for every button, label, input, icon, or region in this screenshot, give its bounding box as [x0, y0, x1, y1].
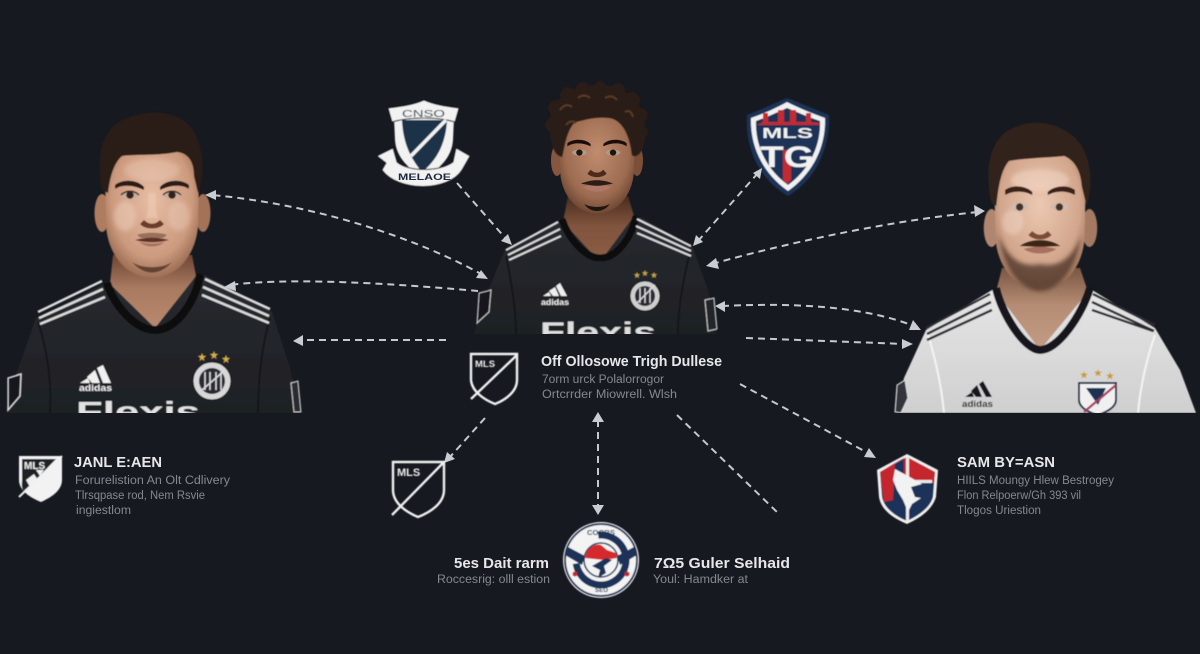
- jersey: left player: adidas: [79, 383, 112, 394]
- heading: bottom left: 5es Dait rarm: [454, 555, 549, 572]
- logo: bottom round badge: [563, 522, 639, 598]
- text: MLS left: MLS: [24, 461, 45, 472]
- text: left line 3: ingiestlom: [76, 505, 131, 517]
- text: TG: TG: [760, 141, 814, 174]
- text: left line 2: Tlrsqpase rod, Nem Rsvie: [75, 490, 205, 502]
- text: bottom left line: Roccesrig: olll estion: [437, 574, 550, 586]
- logo: MLS shield left: [19, 456, 62, 502]
- text: right line 3: Tlogos Uriestion: [957, 505, 1041, 517]
- jersey: left player: [6, 255, 301, 427]
- text: badge bottom: SEO: [595, 588, 608, 594]
- jersey: center player: Flexis: [540, 317, 656, 347]
- logo: MLS TG crest: [747, 98, 829, 196]
- head: right player: [984, 123, 1097, 291]
- text: right line 1: HIILS Moungy Hlew Bestrogey: [957, 475, 1114, 487]
- jersey: center player: adidas: [541, 298, 570, 307]
- text: left line 1: Forurelistion An Olt Cdlivery: [75, 475, 230, 487]
- logo: CNSO crest: [377, 100, 470, 186]
- heading: left player: JANL E:AEN: [74, 454, 162, 471]
- player: right, white jersey: [895, 123, 1196, 415]
- text block: left player info: [74, 454, 230, 517]
- infographic canvas: [6, 80, 1196, 599]
- text block: bottom left info: [437, 555, 550, 586]
- text: MLS: MLS: [762, 125, 813, 142]
- text: center line 1: 7orm urck Polalorrogor: [542, 374, 664, 386]
- text: bottom right line: Youl: Hamdker at: [653, 574, 749, 586]
- text: MLS lower left: MLS: [397, 467, 420, 479]
- text: right line 2: Flon Relpoerw/Gh 393 vil: [957, 490, 1081, 502]
- text: MLS center: MLS: [475, 359, 495, 370]
- text: CNSO crest top: CNSO: [402, 109, 445, 120]
- jersey: right player: adidas: [962, 399, 993, 410]
- text block: right player info: [957, 454, 1114, 517]
- head: center player: [551, 108, 643, 213]
- head: left player: [94, 113, 210, 278]
- text: center line 2: Ortcrrder Miowrell. Wlsh: [542, 389, 677, 401]
- text block: bottom right info: [653, 555, 790, 586]
- text: CNSO crest bottom: MELAOE: [398, 172, 451, 182]
- heading: right player: SAM BY=ASN: [957, 454, 1055, 471]
- jersey: right player: [895, 268, 1196, 415]
- text block: center info: [541, 353, 722, 401]
- logo: MLS shield lower left: [392, 462, 444, 517]
- text: badge top: COOBS: [587, 530, 615, 537]
- heading: center info: Off Ollosowe Trigh Dullese: [541, 353, 722, 370]
- hair: center player: [545, 81, 648, 157]
- logo: right red and navy crest: [877, 454, 938, 524]
- jersey: left player: Flexis: [76, 396, 200, 427]
- jersey: center player: [474, 196, 717, 347]
- heading: bottom right: 7Ω5 Guler Selhaid: [654, 555, 790, 572]
- logo: MLS shield center: [471, 354, 517, 404]
- player: center, black jersey: [474, 81, 717, 347]
- arrows: dashed connectors: [205, 168, 985, 515]
- player: left, black jersey: [6, 113, 301, 427]
